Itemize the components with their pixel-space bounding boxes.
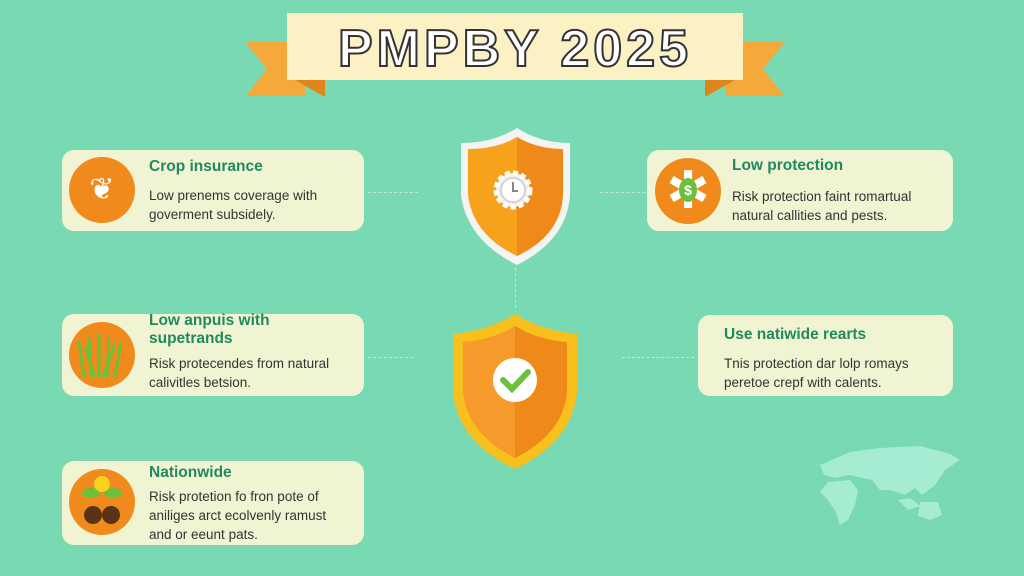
text: peretoe crepf with calents. (724, 375, 882, 390)
text (149, 188, 317, 222)
heading: Use natiwide rearts (724, 326, 866, 343)
text: Tnis protection dar lolp romays (724, 356, 909, 371)
text: aniliges arct ecolvenly ramust (149, 508, 326, 523)
heading: Nationwide (149, 464, 232, 481)
text: natural callities and pests. (732, 208, 887, 223)
icon: plant (69, 469, 135, 535)
card: low inputs (62, 314, 364, 396)
text: Low prenems coverage with (149, 188, 317, 203)
heading: supetrands (149, 330, 233, 347)
card: crop insurance (62, 150, 364, 231)
text (732, 189, 911, 223)
map: world (820, 446, 960, 525)
icon: leaves (69, 157, 135, 223)
icon: gear money (655, 158, 721, 224)
text: Risk protetion fo fron pote of (149, 489, 319, 504)
icon: gear money: $ (684, 182, 692, 198)
text: and or eeunt pats. (149, 527, 258, 542)
shield: clock gear (461, 128, 570, 265)
text: Risk protecendes from natural (149, 356, 329, 371)
text: goverment subsidely. (149, 207, 276, 222)
heading: Low protection (732, 157, 843, 174)
text: Risk protection faint romartual (732, 189, 911, 204)
text (149, 489, 326, 542)
icon: grass (69, 322, 135, 388)
card: use nationwide (698, 315, 953, 396)
card: low protection (647, 150, 953, 231)
shield: check (453, 314, 577, 469)
text: calivitles betsion. (149, 375, 251, 390)
card: nationwide (62, 461, 364, 545)
icon: leaves: ❦ (89, 173, 115, 206)
text (149, 356, 329, 390)
icon: gear money: ✱ (666, 162, 710, 220)
heading: Crop insurance (149, 158, 263, 175)
heading (149, 312, 270, 347)
title banner: PMPBY 2025 (338, 20, 692, 78)
title banner (245, 13, 785, 96)
heading: Low anpuis with (149, 312, 270, 329)
connectors (368, 192, 418, 193)
text (724, 356, 909, 390)
